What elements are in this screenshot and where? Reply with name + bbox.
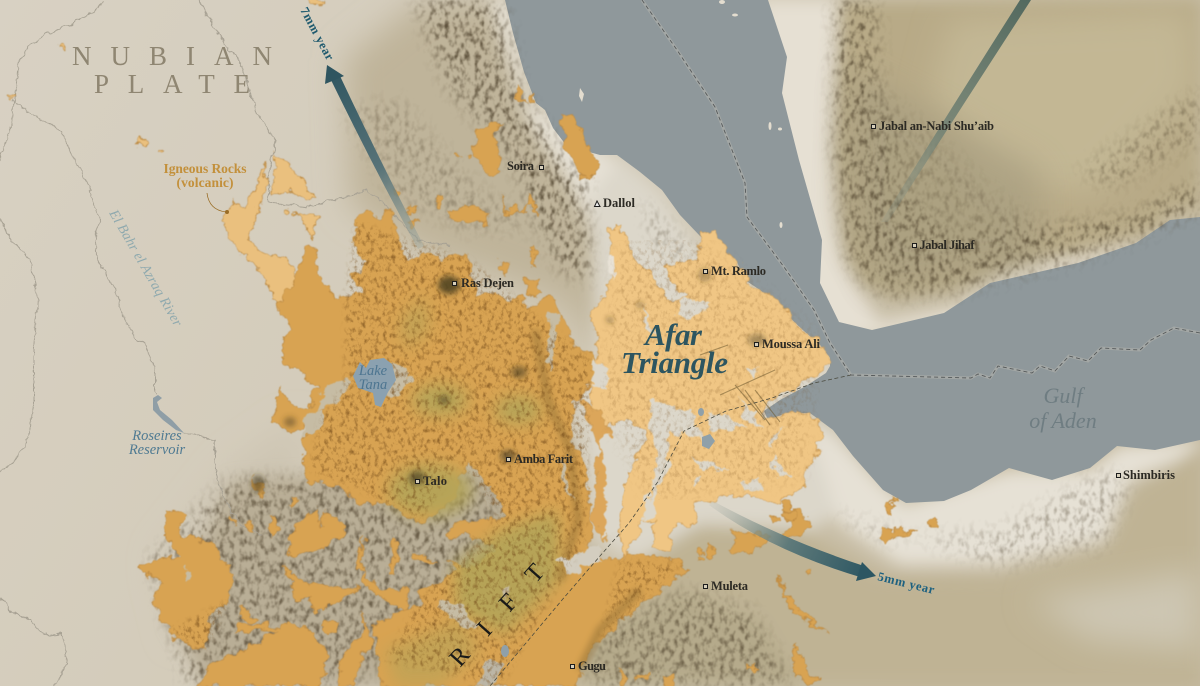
Afar fault scarps bbox=[700, 345, 780, 425]
label: Afar Triangle: Triangle bbox=[621, 345, 728, 380]
volcanic peak shading bbox=[252, 268, 766, 493]
label: Gulf of Aden: Gulf bbox=[1043, 383, 1085, 408]
arrow: south-east plate motion bbox=[709, 501, 876, 581]
Roseires Reservoir bbox=[153, 395, 184, 433]
label: Igneous Rocks legend: (volcanic) bbox=[176, 175, 234, 190]
sea islands bbox=[579, 0, 782, 228]
igneous rocks: Afar Triangle bbox=[580, 225, 830, 560]
label: Lake Tana: Lake bbox=[358, 363, 388, 379]
hillshade on volcanic rock bbox=[170, 222, 680, 686]
label: Roseires Reservoir: Roseires bbox=[131, 428, 182, 444]
maritime border bbox=[490, 0, 1200, 686]
place: Moussa Ali: Moussa Ali bbox=[762, 337, 821, 351]
label: Igneous Rocks legend: Igneous Rocks bbox=[164, 161, 246, 176]
label: El Bahr el Azraq River: El Bahr el Azraq River bbox=[105, 207, 185, 330]
label: 5mm year: 5mm year bbox=[876, 569, 936, 597]
arrow: north-east plate motion bbox=[881, 0, 1031, 222]
place: Jabal an-Nabi Shu'aib: Jabal an-Nabi Shu’aib bbox=[879, 119, 994, 133]
place: Soira: Soira bbox=[507, 159, 535, 173]
place: Jabal Jihaf: Jabal Jihaf bbox=[920, 238, 975, 252]
igneous: small eastern outliers bbox=[531, 90, 939, 686]
igneous: south-western lobes bbox=[138, 478, 480, 686]
label: Rift: RIFT bbox=[444, 559, 550, 672]
place: Amba Farit: Amba Farit bbox=[514, 452, 574, 466]
label: Lake Tana: Tana bbox=[359, 377, 387, 393]
place: Shimbiris: Shimbiris bbox=[1123, 468, 1175, 482]
label: Roseires Reservoir: Reservoir bbox=[128, 442, 186, 458]
olive uplands bbox=[385, 295, 560, 686]
rivers bbox=[0, 0, 450, 686]
label: Lake Tana bbox=[358, 363, 388, 393]
label: Nubian Plate: PLATE bbox=[94, 69, 250, 99]
place: Talo: Talo bbox=[423, 474, 447, 488]
place: Ras Dejen: Ras Dejen bbox=[461, 276, 514, 290]
terrain overlays on igneous rock bbox=[170, 222, 820, 686]
label: Nubian Plate bbox=[72, 41, 272, 99]
label: Gulf of Aden bbox=[1029, 383, 1097, 433]
Lake Tana bbox=[353, 358, 396, 407]
label: Afar Triangle: Afar bbox=[643, 317, 703, 352]
igneous: eastern patches bbox=[394, 84, 542, 296]
place: Gugu: Gugu bbox=[578, 659, 606, 673]
label: Gulf of Aden: of Aden bbox=[1029, 408, 1097, 433]
label: 7mm year: 7mm year bbox=[297, 5, 337, 63]
dark escarpment along the rift edge bbox=[535, 330, 640, 670]
sea: Red Sea and Gulf of Aden bbox=[505, 0, 1200, 503]
label: Nubian Plate: NUBIAN bbox=[72, 41, 272, 71]
igneous rocks: western plateau and patches bbox=[6, 0, 939, 686]
place: Muleta: Muleta bbox=[711, 579, 749, 593]
igneous: main highland mass bbox=[272, 209, 690, 686]
gaps in the volcanic cover bbox=[186, 250, 790, 686]
label: Afar Triangle bbox=[621, 317, 728, 380]
place: Dallol: Dallol bbox=[603, 196, 636, 210]
igneous: northern outliers bbox=[6, 0, 322, 315]
label: Igneous Rocks legend bbox=[164, 161, 246, 214]
place markers and names bbox=[416, 119, 1175, 673]
label: Roseires Reservoir bbox=[128, 428, 186, 458]
place: Mt. Ramlo: Mt. Ramlo bbox=[711, 264, 766, 278]
arrow: north-west plate motion bbox=[325, 65, 424, 249]
Lake Abbe and small lakes bbox=[501, 408, 715, 657]
